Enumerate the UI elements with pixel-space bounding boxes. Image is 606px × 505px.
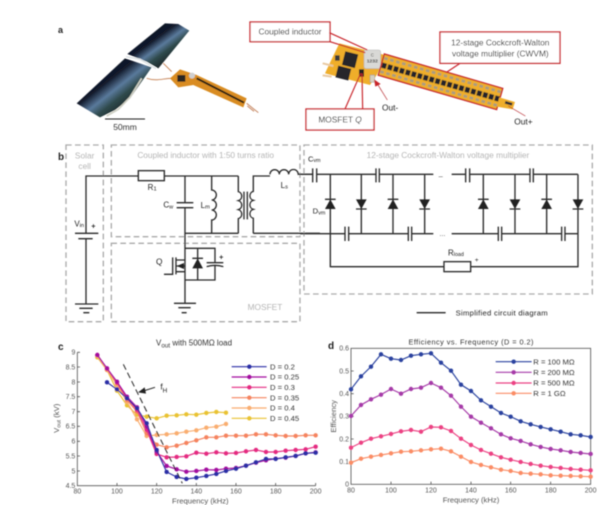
- dashed box: coupled inductor: Coupled inductor with 1:50 turns ratio: [137, 150, 274, 160]
- series R = 1 GOhm: [351, 449, 591, 477]
- legend: D = 0.25: [270, 373, 299, 382]
- fH arrow and label: H: [163, 387, 168, 394]
- inductor Ls: s: [285, 185, 288, 191]
- x tick labels: 200: [585, 487, 597, 494]
- x tick labels: 80: [73, 489, 81, 496]
- capacitor Cw: C: [163, 201, 169, 210]
- callout: CWVM: [440, 32, 560, 73]
- series D = 0.2: [107, 382, 316, 479]
- y tick labels: 4.5: [66, 483, 75, 490]
- dashed guide line fH: [123, 364, 182, 483]
- resistor R1: [138, 171, 164, 193]
- legend: R = 100 MΩ: [533, 357, 575, 366]
- chart title: with 500MΩ load: [170, 338, 232, 347]
- x tick labels: [347, 487, 597, 494]
- x tick labels: 200: [310, 489, 322, 496]
- dashed box: coupled inductor: [111, 145, 300, 237]
- dashed box: CWVM: 12-stage Cockcroft-Walton voltage multiplier: [367, 150, 530, 160]
- bottom rail with capacitors: [300, 227, 578, 241]
- connecting wires: [147, 63, 172, 80]
- legend: D = 0.45: [270, 414, 299, 423]
- legend: R = 1 GΩ: [533, 389, 566, 398]
- solar panel lower: [77, 58, 152, 117]
- chart c: Vout with 500 MOhm load: out: [56, 420, 62, 428]
- series D = 0.25: [97, 355, 316, 472]
- wire to multiplier: [253, 231, 320, 235]
- chips: [335, 50, 358, 81]
- x tick labels: [73, 489, 322, 496]
- dashed box: CWVM: [304, 145, 592, 294]
- input leads: [323, 63, 333, 77]
- inductor Lm: m: [205, 205, 210, 211]
- y tick labels: 5: [71, 468, 75, 475]
- y tick labels: 0.1: [339, 459, 349, 466]
- top wire and bottom wire: [164, 176, 238, 233]
- chart c: Vout with 500 MOhm load: V: [52, 428, 61, 433]
- panel a label: a: [58, 25, 64, 35]
- circuit diagram: voltage multiplier: [300, 145, 592, 318]
- x tick labels: 100: [111, 489, 123, 496]
- multiplier board: [378, 54, 503, 110]
- capacitor Cw: w: [168, 204, 174, 210]
- diodes: [313, 174, 583, 234]
- coupled inductor: 1232: [367, 59, 378, 65]
- scale bar 50mm: 50mm: [113, 122, 137, 132]
- inductor Lm: [201, 176, 216, 233]
- resistor R1: R: [148, 183, 153, 192]
- x tick labels: 120: [425, 487, 437, 494]
- y tick labels: 7: [71, 409, 75, 416]
- legend: [232, 362, 299, 423]
- load resistor: +: [475, 257, 479, 264]
- y tick labels: 0.4: [339, 391, 349, 398]
- chart c: Vout with 500 MOhm load: [52, 338, 322, 505]
- fH arrow and label: [138, 381, 168, 394]
- y tick labels: 9: [71, 350, 75, 357]
- inductor Lm: L: [201, 201, 205, 210]
- x tick labels: 180: [545, 487, 557, 494]
- board chip: [177, 75, 185, 82]
- coupled inductor: C: [371, 53, 374, 58]
- series R = 100 MOhm: [351, 353, 591, 437]
- dashed box: solar cell: [66, 145, 103, 322]
- y tick labels: [339, 346, 349, 489]
- input source Vin: +: [91, 222, 95, 231]
- diodes: D: [313, 207, 318, 216]
- series R = 200 MOhm: [351, 383, 591, 454]
- x tick labels: 100: [385, 487, 397, 494]
- y tick labels: [66, 350, 75, 490]
- inductor: [189, 73, 195, 79]
- y tick labels: 6.5: [66, 424, 75, 431]
- x tick labels: 120: [151, 489, 163, 496]
- series D = 0.3: [97, 355, 316, 457]
- label Out- with arrow: [374, 79, 398, 113]
- body diode and capacitor: [185, 248, 223, 280]
- chart c: Vout with 500 MOhm load: (kV): [52, 403, 61, 420]
- output tail: [497, 97, 515, 109]
- transformer: [238, 176, 270, 233]
- chart d: efficiency vs frequency: [329, 338, 597, 505]
- dashed box: solar cell: cell: [78, 161, 91, 171]
- input source Vin: V: [74, 219, 80, 228]
- dashed box: solar cell: Solar: [75, 150, 95, 160]
- top rail with capacitors: –: [439, 172, 444, 181]
- callout: CWVM: 12-stage Cockcroft-Walton: [451, 38, 550, 48]
- dashed box: MOSFET: MOSFET: [248, 302, 282, 312]
- y tick labels: 7.5: [66, 394, 75, 401]
- output leads: [247, 103, 258, 113]
- small component: [335, 55, 340, 61]
- x tick labels: 160: [505, 487, 517, 494]
- input source Vin: in: [80, 223, 84, 229]
- label Out+ with arrow: Out+: [514, 116, 533, 126]
- y tick labels: 6: [71, 439, 75, 446]
- x tick labels: 140: [190, 489, 202, 496]
- bottom rail with capacitors: ...: [439, 229, 445, 238]
- chart title: Efficiency vs. Frequency (D = 0.2): [408, 338, 533, 347]
- driver board: [325, 43, 385, 85]
- legend: D = 0.2: [270, 362, 295, 371]
- diodes: vm: [318, 210, 326, 216]
- capacitor Cw: [163, 176, 193, 303]
- callout: CWVM: voltage multiplier (CWVM): [452, 48, 549, 58]
- white hinge strip: [126, 57, 156, 69]
- MOSFET Q switch: Q: [156, 257, 163, 267]
- chart title: V: [156, 338, 161, 347]
- series D = 0.4: [97, 356, 226, 436]
- panel c label: c: [58, 342, 64, 353]
- callout: coupled inductor: Coupled inductor: [259, 26, 322, 36]
- x tick labels: 80: [347, 487, 355, 494]
- y tick labels: 0.3: [339, 414, 349, 421]
- y tick labels: 0.6: [339, 346, 349, 353]
- y tick labels: 0.2: [339, 436, 349, 443]
- y tick labels: 5.5: [66, 453, 75, 460]
- input source Vin: [74, 176, 138, 313]
- chart title: out: [161, 342, 170, 349]
- y tick labels: 0: [345, 482, 349, 489]
- callout: MOSFET Q: [306, 73, 374, 130]
- label Out+ with arrow: [508, 106, 533, 126]
- photo: solar-powered wing with circuit board: [77, 23, 258, 117]
- body diode and capacitor: +: [219, 252, 223, 261]
- MOSFET Q switch: [156, 257, 185, 274]
- inductor Ls: L: [281, 181, 285, 190]
- y tick labels: 0.5: [339, 368, 349, 375]
- y tick labels: 8: [71, 379, 75, 386]
- multiplier dark strip: [197, 78, 244, 103]
- pale edge of lower panel: [107, 78, 142, 116]
- label Out- with arrow: Out-: [382, 103, 398, 113]
- load resistor: R: [448, 248, 454, 257]
- legend: R = 500 MΩ: [533, 379, 575, 388]
- x tick labels: 140: [465, 487, 477, 494]
- resistor R1: 1: [153, 187, 157, 193]
- legend: R = 200 MΩ: [533, 368, 575, 377]
- axes: [77, 352, 316, 486]
- top rail with capacitors: [300, 154, 578, 182]
- MOSFET component: [359, 69, 364, 77]
- load resistor: load: [454, 252, 464, 258]
- y tick labels: 8.5: [66, 364, 75, 371]
- chart d: efficiency vs frequency: Efficiency: [329, 400, 338, 433]
- solar panel upper: [127, 23, 189, 68]
- top rail with capacitors: C: [308, 154, 314, 163]
- x tick labels: 180: [270, 489, 282, 496]
- legend: D = 0.4: [270, 404, 296, 413]
- callout: MOSFET Q: MOSFET Q: [318, 115, 362, 125]
- callout: coupled inductor: [250, 22, 367, 53]
- dashed box: MOSFET: [111, 243, 300, 322]
- panel b label: b: [58, 152, 64, 163]
- series D = 0.45: [97, 357, 226, 418]
- panel d label: d: [328, 341, 334, 352]
- scale bar 50mm: [105, 119, 145, 132]
- load resistor: [330, 234, 578, 272]
- legend: D = 0.35: [270, 393, 299, 402]
- axes: [351, 348, 591, 484]
- top rail with capacitors: vm: [314, 158, 321, 164]
- fH arrow and label: f: [160, 381, 163, 391]
- axis titles: Frequency (kHz): [443, 496, 500, 505]
- circuit diagram: left half: [66, 145, 320, 322]
- series R = 500 MOhm: [351, 427, 591, 470]
- x tick labels: 160: [230, 489, 242, 496]
- legend: D = 0.3: [270, 383, 295, 392]
- output capacitor: [370, 75, 375, 82]
- coupled inductor: [364, 50, 381, 69]
- series D = 0.35: [97, 355, 316, 447]
- inductor Ls: [270, 169, 313, 191]
- legend: [496, 357, 575, 398]
- photo: annotated circuit board: [250, 22, 560, 130]
- ground: [174, 303, 196, 313]
- legend: simplified circuit diagram: Simplified circuit diagram: [456, 309, 548, 318]
- flexible circuit board: [170, 69, 247, 107]
